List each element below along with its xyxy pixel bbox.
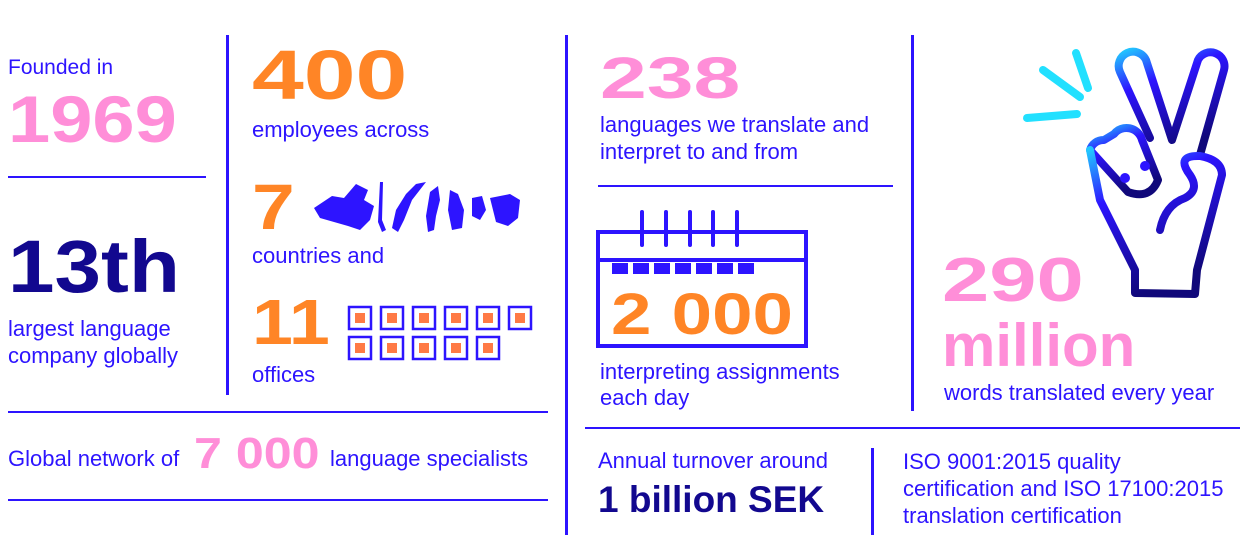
290 million block: words translated every year — [944, 380, 1214, 405]
icon: country maps — [314, 182, 520, 232]
icon: calendar: 2 000 — [611, 282, 793, 347]
turnover block — [598, 448, 828, 520]
languages block: 238 — [600, 46, 740, 111]
employees block — [252, 36, 429, 142]
turnover block: 1 billion SEK — [598, 479, 824, 520]
13th block — [8, 225, 180, 368]
ISO certification text: certification and ISO 17100:2015 — [903, 476, 1223, 501]
icon: calendar — [596, 210, 808, 348]
ISO certification text: ISO 9001:2015 quality — [903, 449, 1121, 474]
290 million block: million — [942, 312, 1135, 379]
countries block — [252, 171, 520, 268]
global network line: language specialists — [330, 446, 528, 471]
languages block: languages we translate and — [600, 112, 869, 137]
global network line — [8, 429, 528, 478]
founded block: Founded in — [8, 56, 113, 79]
turnover block: Annual turnover around — [598, 448, 828, 473]
calendar block — [596, 210, 840, 410]
13th block: largest language — [8, 316, 171, 341]
calendar block: each day — [600, 385, 689, 410]
ISO certification text: translation certification — [903, 503, 1122, 528]
290 million block: 290 — [942, 246, 1084, 315]
employees block: 400 — [252, 36, 407, 114]
13th block: 13th — [8, 225, 180, 308]
countries block: countries and — [252, 243, 384, 268]
founded block: 1969 — [8, 82, 177, 156]
global network line: 7 000 — [194, 429, 320, 478]
ISO certification text — [903, 449, 1223, 528]
offices block: offices — [252, 362, 315, 387]
icon: office squares — [348, 306, 532, 360]
calendar block: interpreting assignments — [600, 359, 840, 384]
icon: peace hand — [1023, 48, 1228, 298]
290 million block — [942, 246, 1214, 405]
offices block: 11 — [252, 286, 330, 358]
languages block — [600, 46, 869, 164]
countries block: 7 — [252, 171, 295, 243]
13th block: company globally — [8, 343, 178, 368]
languages block: interpret to and from — [600, 139, 798, 164]
employees block: employees across — [252, 117, 429, 142]
global network line: Global network of — [8, 446, 179, 471]
offices block — [252, 286, 532, 387]
